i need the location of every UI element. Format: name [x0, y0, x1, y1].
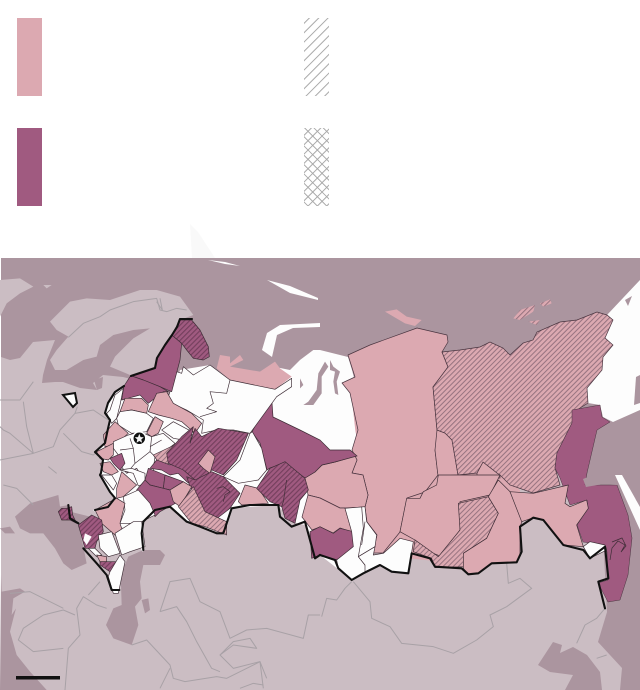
hatched arctic islands [513, 299, 552, 325]
white Voronezh [102, 475, 117, 490]
hatched dark Bashkortostan [187, 472, 240, 520]
foreign land masses [0, 278, 622, 690]
region: central Russia [103, 388, 202, 482]
pink Karachay [97, 555, 107, 562]
white coast [88, 548, 102, 557]
region: Caucasus [58, 507, 145, 593]
Murmansk hatched dark [172, 320, 209, 360]
pink Krasnodar [95, 498, 125, 535]
Zabaykalye pink [463, 480, 523, 574]
hatched dark North Caucasus [100, 562, 118, 572]
pink Orenburg [170, 482, 192, 507]
Kemerovo and Altai white [337, 507, 377, 580]
dark Penza [145, 468, 165, 488]
hatched dark Chelyabinsk [257, 462, 308, 523]
Amur pink [510, 485, 588, 547]
hatched dark Kirov [167, 427, 248, 480]
white Tambov [120, 468, 145, 486]
Nenets pink coast [217, 355, 292, 389]
legend swatch: diagonal hatch [304, 18, 329, 96]
Pskov white [107, 388, 123, 423]
pink enclave [198, 450, 215, 473]
foreign borders [0, 298, 607, 690]
arctic islands and white regions [208, 260, 640, 530]
lake [94, 377, 103, 390]
faint arrow mark above map [190, 224, 215, 258]
region: lower Volga [95, 468, 227, 535]
base fill: eastern Russia [352, 400, 520, 562]
white Tatarstan [223, 432, 267, 483]
Tver white [117, 410, 153, 433]
arctic pink islands [385, 309, 422, 326]
white Stavropol [98, 532, 120, 557]
pink Bashkir edge [238, 485, 268, 505]
Kaliningrad exclave [63, 393, 77, 407]
pink notch in Yakutia [477, 462, 500, 478]
base fill: western Russia [93, 350, 370, 580]
legend swatch: cross hatch [304, 128, 329, 206]
hatched pink Nizhny [153, 440, 185, 467]
legend swatch: dark plum [17, 128, 42, 206]
Omsk dark [310, 527, 355, 560]
Yamal and Gydan white [270, 350, 357, 450]
Moscow star marker [133, 432, 146, 445]
Karelia dark [131, 335, 182, 392]
dark Penza cluster [150, 453, 205, 488]
Buryatia hatched pink [413, 497, 498, 568]
thick national border [68, 319, 608, 608]
hatched pink border region [178, 487, 227, 535]
region: Far East dark [555, 405, 632, 602]
Vologda pink [148, 392, 202, 433]
pink Saratov [117, 472, 137, 498]
white Rostov [120, 490, 155, 523]
region: Yakutia hatched pink [433, 312, 613, 493]
dark Samara [137, 480, 178, 517]
Kostroma white [162, 422, 195, 440]
Jewish AO white [583, 542, 607, 558]
sea background [1, 258, 640, 690]
yellow sea inlet [538, 642, 602, 690]
region: north-west [122, 320, 292, 433]
Irkutsk pink [400, 475, 500, 557]
region: Urals dark Tyumen [252, 403, 357, 478]
inland seas [0, 495, 165, 690]
regions: southern Siberia and Far East [310, 475, 607, 580]
white Kalmykia [115, 522, 145, 555]
Arkhangelsk-Komi white [168, 365, 292, 433]
Smolensk pink [103, 422, 128, 447]
hatched dark Caucasus [78, 515, 103, 548]
pink Bryansk [97, 443, 113, 460]
region: Kirov, Bashkortostan, Chelyabinsk hatched [167, 427, 308, 523]
region: pink between Krasnoyarsk and Yakutia [435, 430, 458, 476]
white spot [83, 533, 92, 545]
dark Kursk [110, 453, 125, 470]
central white cluster [113, 432, 175, 482]
pink Belgorod [100, 462, 118, 475]
region: Volga and south-central [97, 440, 205, 488]
dark Ulyanovsk [163, 475, 183, 490]
scale bar [16, 676, 60, 680]
sea channel east coast [634, 375, 640, 405]
hatched dark Crimea [58, 507, 77, 523]
map panel [0, 258, 640, 690]
legend swatch: light pink [17, 18, 42, 96]
Leningrad dark [122, 376, 168, 403]
small bay line [610, 538, 626, 560]
white Dagestan [108, 555, 125, 593]
sea notch with spot [583, 475, 617, 487]
region: Siberian solid pink [302, 328, 448, 553]
Yaroslavl pink [147, 417, 163, 437]
Novgorod pink [120, 398, 148, 413]
